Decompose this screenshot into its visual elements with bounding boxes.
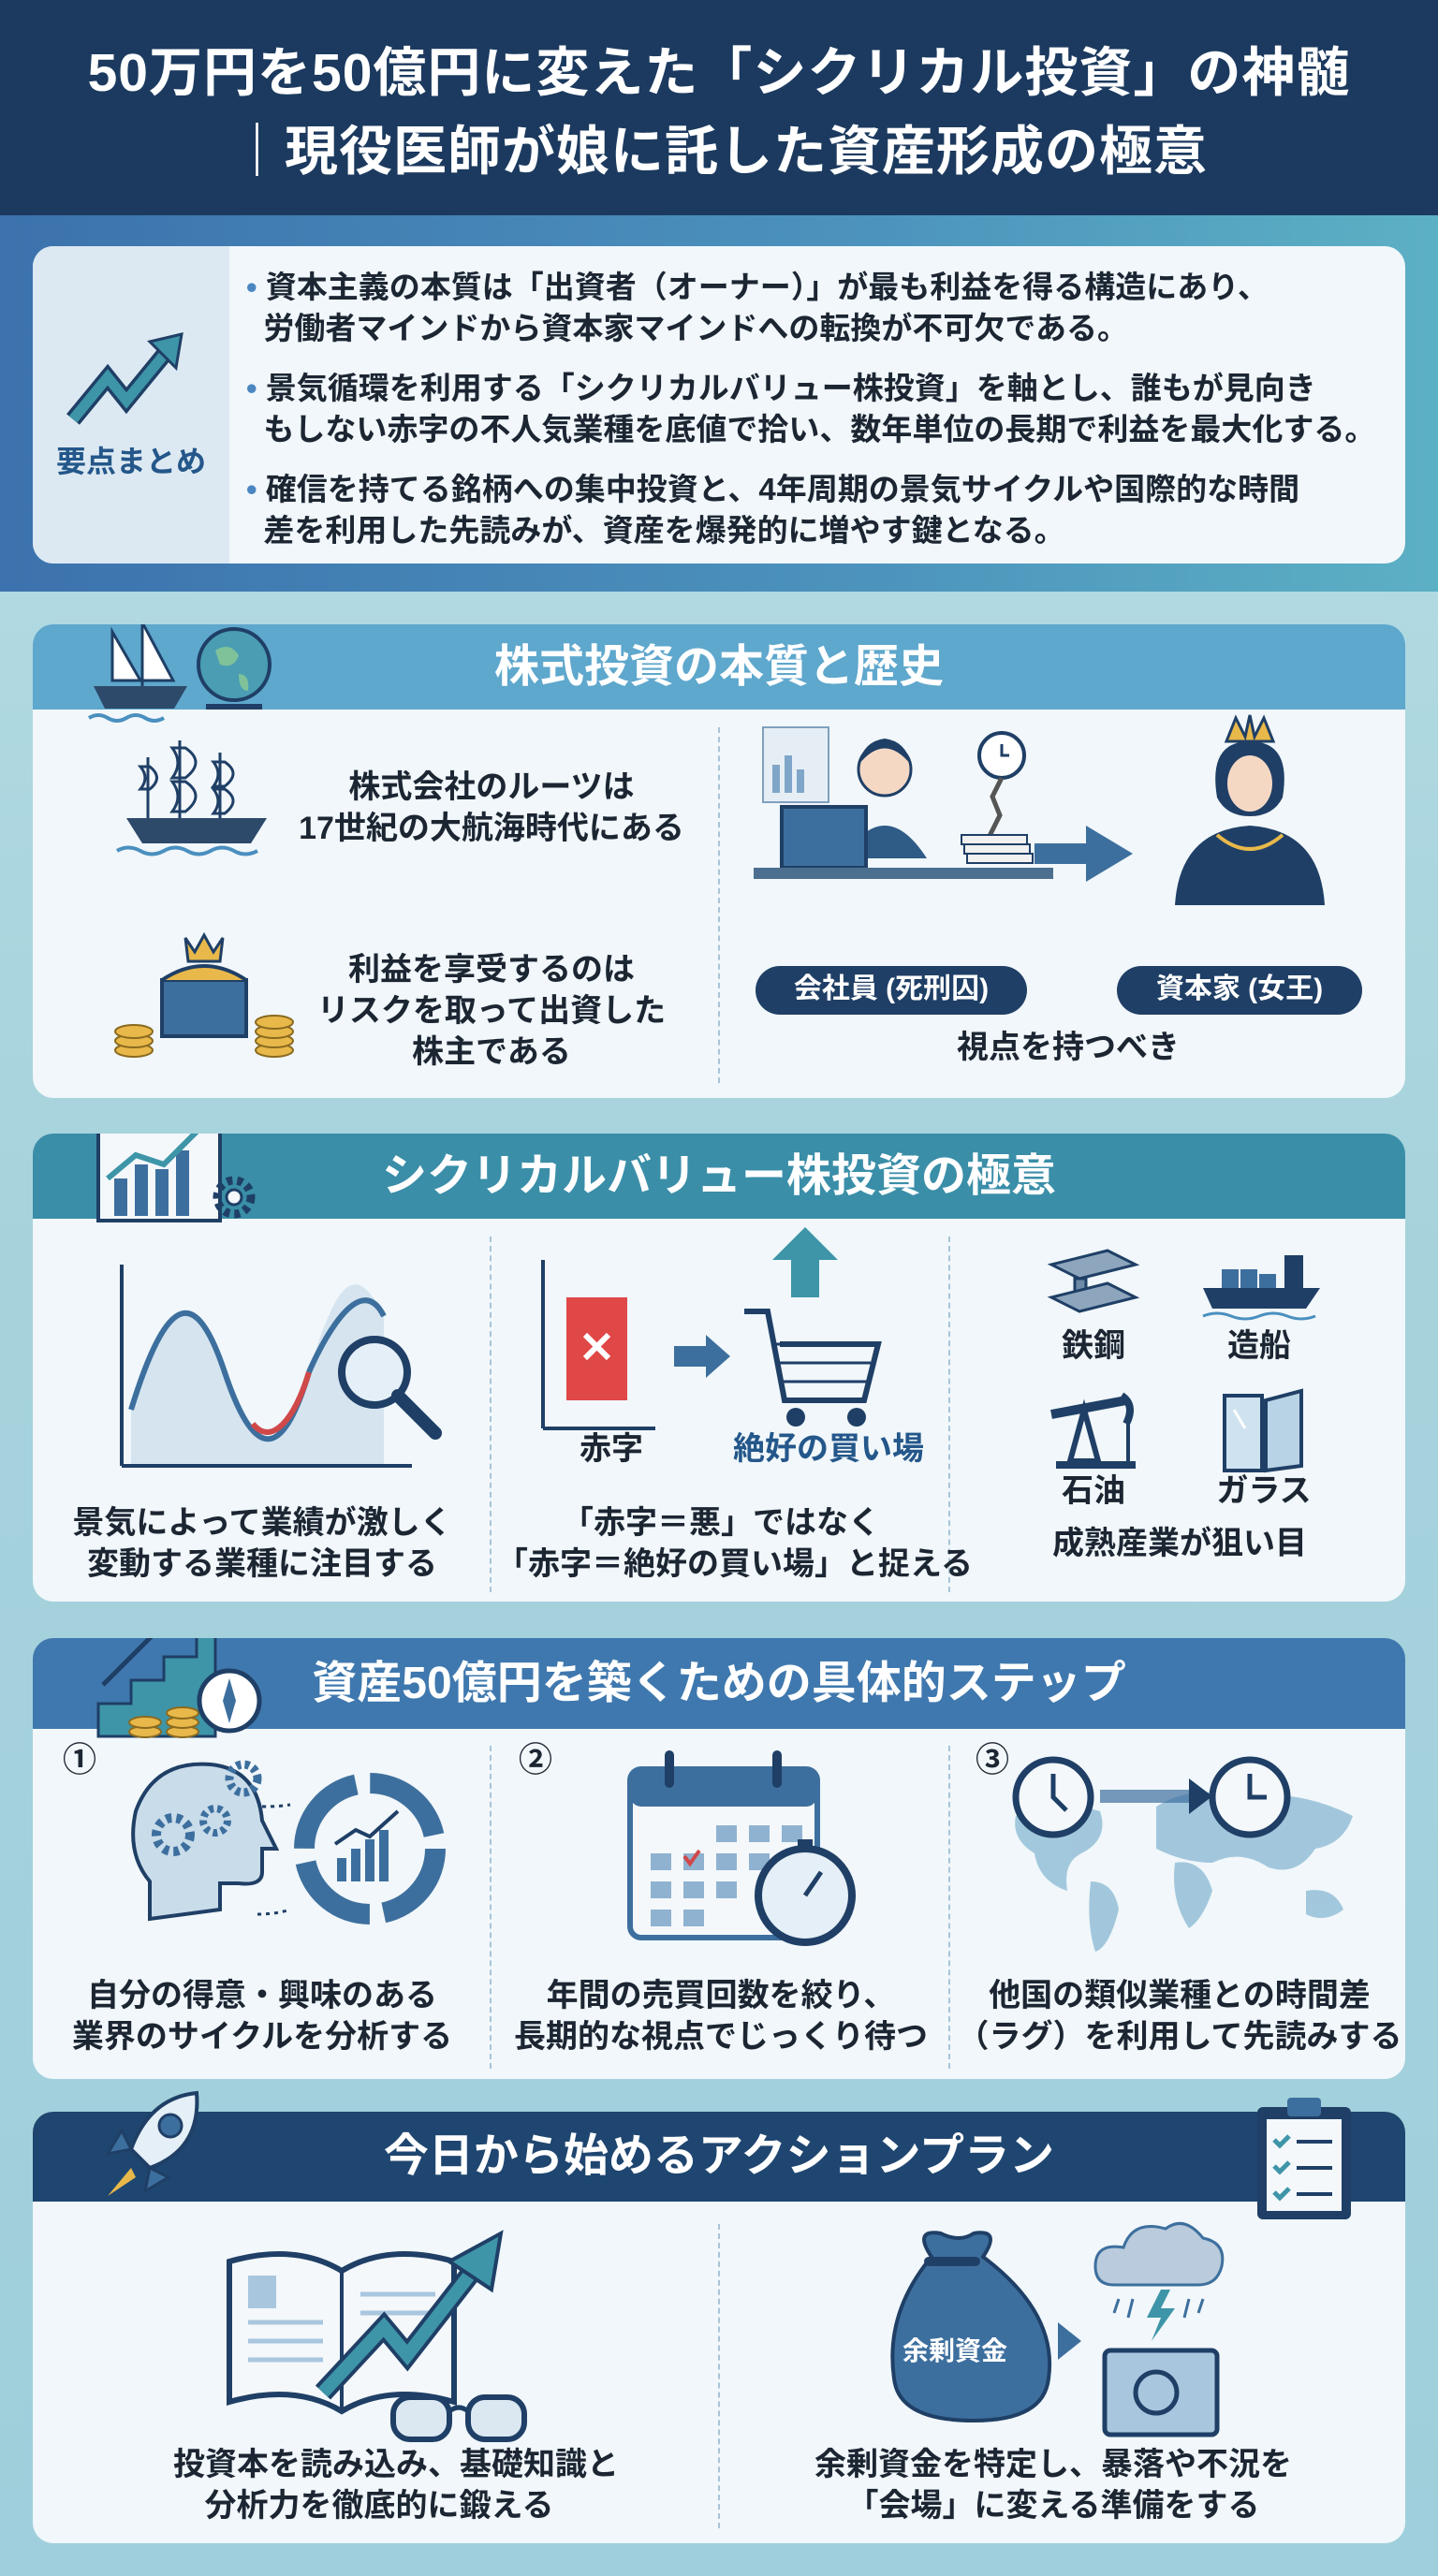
- label: glass: ガラス: [1216, 1473, 1312, 1509]
- icon: world map clocks: [1013, 1756, 1353, 1952]
- icon: money bag to safe in storm: [890, 2222, 1225, 2437]
- icon: rocket: [105, 2091, 198, 2196]
- section 2 header: [33, 1134, 1405, 1219]
- icon: stairs compass: [97, 1638, 262, 1738]
- section 1 header: 株式投資の本質と歴史: [494, 642, 944, 692]
- section 4 header: 今日から始めるアクションプラン: [384, 2131, 1054, 2181]
- text: deficit reframing: 「赤字＝悪」ではなく: [562, 1505, 880, 1541]
- panel: section 3 steps: [33, 1638, 1405, 2079]
- summary bullets: 差を利用した先読みが、資産を爆発的に増やす鍵となる。: [263, 513, 1065, 548]
- text: deficit reframing: [496, 1505, 973, 1582]
- text: step 2: 長期的な視点でじっくり待つ: [514, 2019, 928, 2055]
- text: step 2: [514, 1978, 928, 2055]
- summary label column: [33, 246, 229, 564]
- panel: summary: [33, 246, 1405, 564]
- icon: treasure: [114, 932, 294, 1058]
- step 2 number: ②: [519, 1740, 552, 1778]
- text: cycle focus: 変動する業種に注目する: [87, 1546, 437, 1582]
- panel: section 4 action plan: [33, 2112, 1405, 2543]
- text: mature industries: 成熟産業が狙い目: [1052, 1526, 1307, 1561]
- label: capitalist pill: 資本家 (女王): [1156, 973, 1323, 1004]
- panel: section 2 cyclical: [33, 1134, 1405, 1602]
- text: cycle focus: [72, 1505, 452, 1582]
- section 3 header: 資産50億円を築くための具体的ステップ: [312, 1659, 1126, 1708]
- label: worker pill: 会社員 (死刑囚): [794, 973, 989, 1004]
- arrow: worker to capitalist: [1034, 826, 1133, 882]
- text: step 3: （ラグ）を利用して先読みする: [957, 2019, 1401, 2055]
- summary bullets: • 資本主義の本質は「出資者（オーナー）」が最も利益を得る構造にあり、: [246, 270, 1269, 304]
- icon: office worker chained: [754, 726, 1053, 879]
- text: roots: 株式会社のルーツは: [348, 769, 635, 805]
- icon: queen: [1175, 715, 1325, 905]
- summary bullets: 労働者マインドから資本家マインドへの転換が不可欠である。: [263, 311, 1128, 345]
- text: deficit reframing: 「赤字＝絶好の買い場」と捉える: [496, 1546, 973, 1582]
- icon: clipboard: [1257, 2098, 1351, 2219]
- title: 50万円を50億円に変えた「シクリカル投資」の神髄: [88, 43, 1350, 103]
- section 4 header: [33, 2112, 1405, 2202]
- icon: steel: [1047, 1249, 1140, 1313]
- summary bullets: • 確信を持てる銘柄への集中投資と、4年周期の景気サイクルや国際的な時間: [246, 472, 1299, 506]
- label: steel: 鉄鋼: [1062, 1328, 1125, 1364]
- text: shareholders: 株主である: [412, 1034, 571, 1070]
- icon: money bag to safe in storm: 余剰資金: [902, 2336, 1007, 2365]
- summary bullets: • 景気循環を利用する「シクリカルバリュー株投資」を軸とし、誰もが見向き: [246, 371, 1316, 405]
- text: step 3: [957, 1978, 1401, 2055]
- chart: deficit to buying opportunity: [541, 1227, 882, 1430]
- label: buying opportunity: 絶好の買い場: [733, 1431, 924, 1467]
- summary bullets: [246, 270, 1375, 548]
- text: roots: [299, 769, 684, 846]
- icon: glass: [1223, 1388, 1303, 1473]
- label: capitalist pill: [1117, 966, 1362, 1015]
- section 3 header: [33, 1638, 1405, 1729]
- label: worker pill: [756, 966, 1027, 1015]
- title: [0, 0, 1438, 215]
- text: shareholders: リスクを取って出資した: [317, 993, 666, 1029]
- step 1 number: ①: [63, 1740, 96, 1778]
- text: action 2: 「会場」に変える準備をする: [846, 2488, 1259, 2524]
- text: action 1: 投資本を読み込み、基礎知識と: [173, 2447, 619, 2482]
- text: shareholders: 利益を享受するのは: [348, 952, 635, 988]
- text: step 1: [72, 1978, 452, 2055]
- text: viewpoint: 視点を持つべき: [957, 1030, 1180, 1065]
- text: action 2: [814, 2447, 1292, 2524]
- icon: ship: [1202, 1255, 1320, 1320]
- icon: book with arrow and glasses: [227, 2230, 527, 2442]
- text: step 3: 他国の類似業種との時間差: [989, 1978, 1371, 2013]
- summary heading: 要点まとめ: [56, 445, 206, 478]
- text: cycle focus: 景気によって業績が激しく: [72, 1505, 452, 1541]
- text: step 2: 年間の売買回数を絞り、: [547, 1978, 895, 2013]
- label: deficit: 赤字: [580, 1431, 643, 1467]
- icon: rising arrow: [66, 332, 183, 425]
- text: action 2: 余剰資金を特定し、暴落や不況を: [814, 2447, 1292, 2482]
- text: roots: 17世紀の大航海時代にある: [299, 811, 684, 846]
- chart: business cycle wave: [120, 1265, 442, 1468]
- section 2 header: シクリカルバリュー株投資の極意: [382, 1151, 1056, 1201]
- text: step 1: 自分の得意・興味のある: [87, 1978, 437, 2013]
- text: shareholders: [317, 952, 666, 1070]
- text: action 1: [173, 2447, 619, 2524]
- panel: section 1 history: [33, 624, 1405, 1098]
- icon: oil pump: [1050, 1393, 1136, 1469]
- label: shipbuilding: 造船: [1227, 1328, 1291, 1364]
- text: step 1: 業界のサイクルを分析する: [72, 2019, 452, 2055]
- section 1 header: [33, 624, 1405, 710]
- label: oil: 石油: [1062, 1473, 1125, 1509]
- icon: calendar stopwatch: [627, 1750, 856, 1946]
- step 3 number: ③: [976, 1740, 1009, 1778]
- icon: sailing ship: [116, 740, 267, 856]
- icon: bar chart gear: [96, 1134, 255, 1222]
- icon: head gears cycle: [131, 1760, 446, 1925]
- icon: ship small + globe: [88, 624, 271, 723]
- summary bullets: もしない赤字の不人気業種を底値で拾い、数年単位の長期で利益を最大化する。: [263, 412, 1375, 446]
- text: action 1: 分析力を徹底的に鍛える: [204, 2488, 553, 2524]
- title: ｜現役医師が娘に託した資産形成の極意: [230, 122, 1208, 182]
